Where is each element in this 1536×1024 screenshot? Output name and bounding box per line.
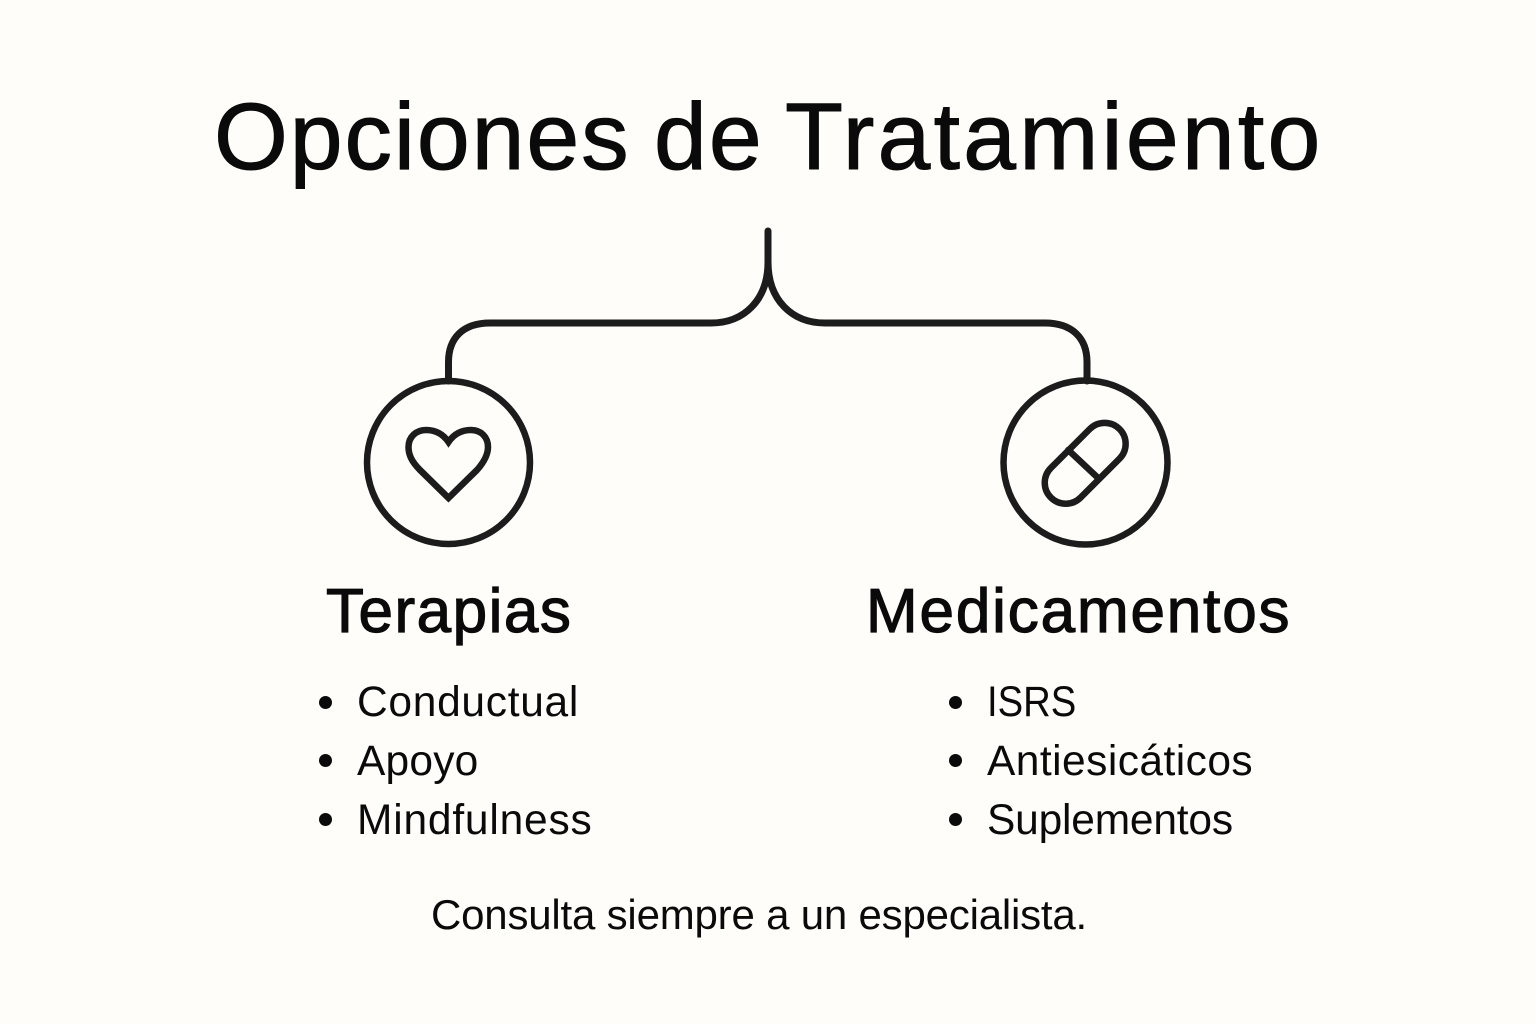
- icon: pill in circle: [1004, 380, 1168, 544]
- list: medications: [949, 679, 1253, 844]
- title: Tratamiento: [785, 84, 1324, 190]
- footer note: Consulta siempre a un especialista.: [431, 891, 1087, 938]
- title: de: [654, 84, 764, 190]
- list: therapies: [319, 679, 593, 844]
- therapy item: Mindfulness: Mindfulness: [357, 797, 593, 844]
- medication item: ISRS: ISRS: [987, 679, 1076, 726]
- therapy item: Conductual: Conductual: [357, 679, 579, 726]
- title: [214, 84, 1324, 190]
- therapy item: Apoyo: Apoyo: [357, 738, 479, 785]
- medication item: Antiesicáticos: Antiesicáticos: [987, 738, 1253, 785]
- medication item: Suplementos: Suplementos: [987, 797, 1233, 844]
- heading: Medicamentos: Medicamentos: [866, 577, 1291, 646]
- icon: heart in circle: [367, 381, 530, 544]
- heading: Terapias: Terapias: [326, 577, 572, 646]
- title: Opciones: [214, 84, 631, 190]
- connector bracket: [448, 231, 1087, 381]
